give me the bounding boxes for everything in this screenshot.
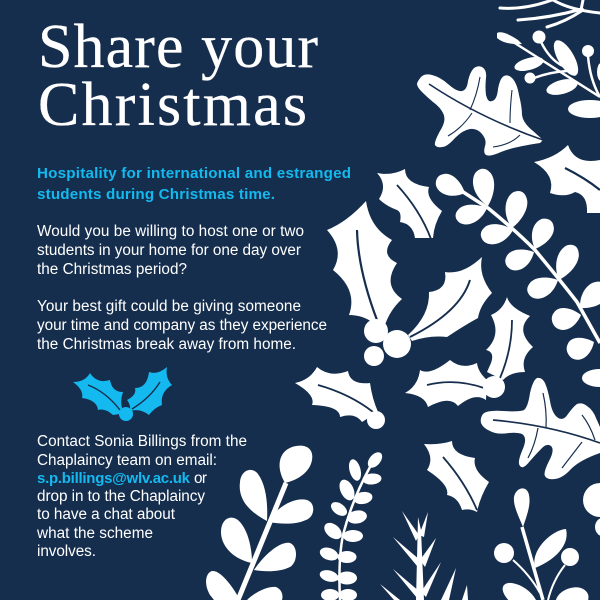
holly leaf: lower (424, 441, 489, 512)
text block: contact: Contact Sonia Billings from the (37, 433, 247, 450)
text block: best gift: Your best gift could be giving someone (37, 298, 301, 315)
oak leaf: right (481, 378, 600, 479)
holly berries (364, 319, 411, 366)
text block: contact: what the scheme (36, 525, 153, 542)
text block: invitation: students in your home for one day over (37, 242, 301, 259)
plant: bottom right berries (494, 488, 592, 600)
holly leaf: left (295, 367, 385, 429)
text block: contact: Chaplaincy team on email: (37, 452, 217, 469)
branch: bottom centre (318, 450, 385, 600)
text block: invitation (37, 223, 304, 278)
plant: pine sprig (380, 511, 468, 600)
icon: blue holly (73, 367, 172, 421)
holly leaf: top right (534, 145, 600, 213)
text block: best gift (37, 298, 327, 353)
branch: bottom left (206, 446, 313, 600)
text block: contact (36, 433, 247, 560)
text block: contact: or (194, 470, 207, 487)
text block: contact: drop in to the Chaplaincy (37, 488, 205, 505)
title: Christmas (38, 71, 307, 139)
subtitle (37, 165, 351, 203)
holly leaf: centre (408, 257, 492, 341)
text block: contact: involves. (37, 543, 96, 560)
text block: contact: to have a chat about (37, 506, 176, 523)
sprig: berries top right (497, 30, 600, 118)
text block: invitation: Would you be willing to host one or two (37, 223, 304, 240)
holly leaf: horizontal (405, 360, 505, 407)
branch: diagonal right (432, 167, 600, 537)
title: Share your (38, 13, 318, 81)
holly leaf: large left (327, 201, 402, 325)
text block: best gift: your time and company as they experience (37, 317, 327, 334)
text block: contact: s.p.billings@wlv.ac.uk (37, 470, 191, 487)
text block: best gift: the Christmas break away from home. (37, 336, 296, 353)
sprig: top edge (500, 0, 600, 27)
subtitle: students during Christmas time. (37, 186, 275, 203)
text block: invitation: the Christmas period? (37, 261, 187, 278)
title (38, 13, 318, 139)
holly leaf: upper small (377, 169, 442, 239)
oak leaf: top (417, 66, 543, 156)
subtitle: Hospitality for international and estranged (37, 165, 351, 182)
holly leaf: right vertical (486, 297, 533, 380)
